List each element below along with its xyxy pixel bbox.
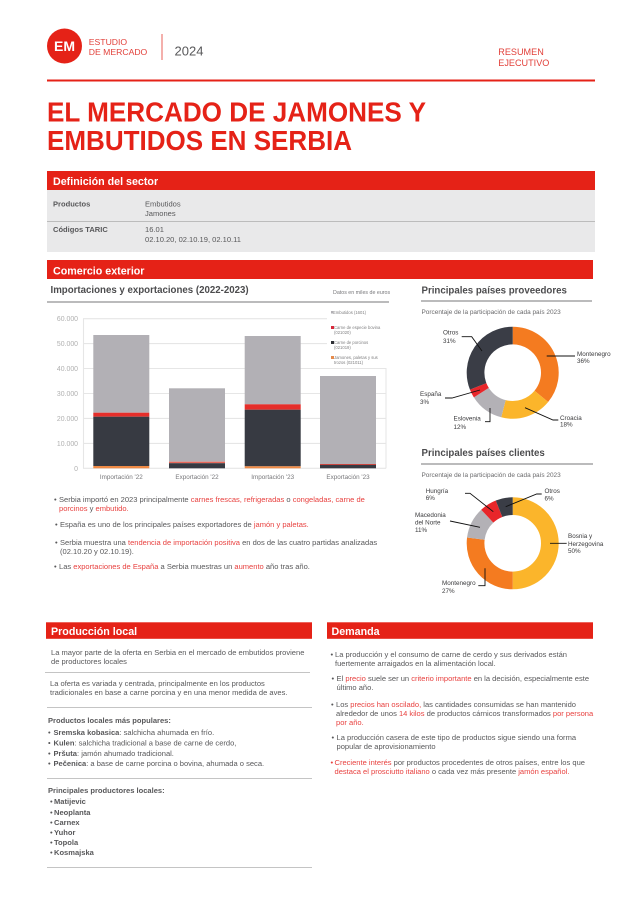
heading: definicion del sector [47,171,595,190]
chart legend: Embutidos (1601) [333,310,367,315]
subtitle: proveedores: Porcentaje de la participación de cada país 2023 [422,309,561,316]
y axis labels: 0 [74,466,78,473]
list: productos locales: • [48,749,51,758]
chart note: Datos en miles de euros [333,290,390,296]
row: codigos taric [53,225,241,244]
text block: variedad: La oferta es variada y centrada, principalmente en los productos [50,679,265,688]
title: EL MERCADO DE JAMONES Y [47,97,426,128]
y axis labels: 20.000 [57,416,78,423]
text block: comercio exterior bullets: Las exportaciones de España a Serbia muestras un aumento año tras año. [59,562,310,571]
text block: comercio exterior bullets: • [54,562,57,571]
x axis labels: Importación '22 [100,474,143,481]
chart legend: trozos (021011) [334,360,364,365]
label: eslovenia: Eslovenia [454,416,481,422]
label: otros: 6% [544,496,554,502]
label: macedonia del norte: Macedonia [415,512,446,519]
heading: importaciones y exportaciones: Importaciones y exportaciones (2022-2023) [50,285,249,296]
label: bosnia y herzegovina: 50% [568,548,581,555]
label: montenegro: Montenegro [577,351,611,358]
logo badge: EM [54,38,75,54]
label: espana [420,390,480,406]
text block: variedad [50,679,287,697]
list: productores locales: Neoplanta [54,808,91,817]
list: productores locales: Yuhor [54,828,75,837]
heading: comercio exterior: Comercio exterior [53,266,144,278]
list: productores locales [48,786,165,857]
label: otros: 31% [443,338,456,345]
list: productores locales: • [50,818,53,827]
document type [498,47,549,68]
text block: demanda bullets: • [332,674,334,683]
label: otros [506,488,560,507]
text block: demanda bullets: La producción y el consumo de carne de cerdo y sus derivados están [335,650,567,659]
panel: definicion del sector [47,171,595,252]
text block: demanda bullets: fuertemente arraigados en la alimentación local. [335,659,496,668]
label: espana: España [420,391,442,398]
list: productores locales: • [50,797,53,806]
text block: oferta: La mayor parte de la oferta en Serbia en el mercado de embutidos proviene [51,648,304,657]
list: productos locales: • [48,728,51,737]
list: productos locales: • [48,738,51,748]
label: montenegro [442,568,485,595]
label: croacia [525,408,582,428]
text block: demanda bullets: • [330,650,334,659]
document type: RESUMEN [498,47,544,57]
label: croacia: 18% [560,422,573,428]
list: productores locales: • [50,838,53,847]
bar: exportacion 22 [169,388,225,468]
heading: definicion del sector: Definición del sector [53,176,158,188]
row: productos: Productos [53,200,90,208]
donut chart: proveedores [420,330,611,431]
panel: demanda [327,622,594,776]
text block: variedad: tradicionales en base a carne porcina y en una menor medida de aves. [50,688,287,697]
text block: comercio exterior bullets: España es uno de los principales países exportadores de jamón y paletas. [60,520,309,529]
y axis labels [57,316,78,473]
text block: comercio exterior bullets: porcinos y embutido. [59,504,129,513]
text block: demanda bullets: destaca el prosciutto italiano o cada vez más presente jamón español. [334,767,569,776]
row: productos: Jamones [145,209,176,218]
list: productores locales: Principales productores locales: [48,786,165,795]
logo wordmark: DE MERCADO [89,47,148,57]
bar: exportacion 23 [320,376,376,468]
text block: comercio exterior bullets: (02.10.20 y 02.10.19). [60,547,134,556]
x axis labels: Importación '23 [251,474,295,481]
text block: comercio exterior bullets: • [54,495,57,504]
heading: principales paises proveedores: Principales países proveedores [422,286,567,296]
list: productos locales: • [48,759,51,768]
y axis labels: 30.000 [57,391,78,398]
label: hungria: 6% [426,495,435,502]
year [162,34,203,60]
heading: demanda: Demanda [332,626,381,638]
text block: demanda bullets: popular de aprovisionamiento [336,742,436,751]
heading: produccion local: Producción local [51,626,137,638]
heading: demanda [327,622,593,639]
text block: demanda bullets: • [332,733,334,742]
list: productores locales: Matijevic [54,797,86,806]
label: montenegro: 36% [577,358,590,365]
label: otros: Otros [443,330,458,336]
logo wordmark [89,37,148,57]
list: productores locales: • [50,808,53,817]
panel: produccion local [45,622,312,868]
list: productores locales: Carnex [54,818,80,827]
row: productos [53,200,181,218]
chart legend: Jamones, paletas y sus [334,355,378,360]
label: bosnia y herzegovina [550,533,604,555]
chart legend [331,310,381,365]
text block: demanda bullets: por año. [336,718,364,727]
row: codigos taric: Códigos TARIC [53,225,108,234]
label: otros: Otros [544,488,560,495]
list: productos locales: Pečenica: a base de carne porcina o bovina, ahumada o seca. [54,759,264,768]
chart legend: (021019) [334,345,351,350]
label: montenegro: Montenegro [442,580,476,587]
text block: demanda bullets: Creciente interés por productos procedentes de otros países, entre los que [334,758,585,767]
list: productores locales: • [50,828,53,837]
document type: EJECUTIVO [498,58,549,68]
chart legend: (021020) [334,330,351,335]
list: productores locales: • [50,848,53,857]
year: 2024 [174,44,203,58]
chart legend: Carne de especie bovina [334,325,381,330]
list: productos locales: Pršuta: jamón ahumado tradicional. [54,749,174,758]
heading: comercio exterior [47,260,593,279]
y axis labels: 40.000 [57,366,78,373]
heading: produccion local [46,622,312,639]
text block: oferta: de productores locales [51,657,127,666]
x axis labels [100,474,370,481]
y axis labels: 10.000 [57,441,78,448]
x axis labels: Exportación '23 [326,474,370,481]
text block: comercio exterior bullets: • [55,520,58,529]
label: bosnia y herzegovina: Herzegovina [568,541,604,548]
header [47,28,595,82]
y axis labels: 50.000 [57,341,78,348]
bar: importacion 23 [245,336,301,468]
text block: demanda bullets: alrededor de unos 14 kilos de productos cárnicos transformados por persona [336,709,594,718]
label: eslovenia [454,408,490,431]
list: productos locales: Productos locales más populares: [48,716,171,725]
text block: comercio exterior bullets [54,495,377,571]
label: espana: 3% [420,399,430,406]
list: productos locales [48,716,264,768]
text block: demanda bullets: El precio suele ser un criterio importante en la decisión, especialmente este [336,674,589,683]
label: otros [443,330,482,351]
row: productos: Embutidos [145,200,181,208]
label: bosnia y herzegovina: Bosnia y [568,533,593,540]
list: productos locales: Sremska kobasica: salchicha ahumada en frío. [54,728,214,737]
text block: demanda bullets: • [330,758,334,767]
text block: demanda bullets: último año. [336,683,373,692]
chart legend: Carne de porcinos [334,340,368,345]
label: macedonia del norte: del Norte [415,520,441,526]
label: eslovenia: 12% [454,424,467,431]
logo wordmark: ESTUDIO [89,37,127,47]
text block: comercio exterior bullets: • [55,538,58,547]
label: montenegro: 27% [442,588,455,595]
label: macedonia del norte [415,512,480,534]
list: productores locales: Kosmajska [54,848,95,857]
row: codigos taric: 02.10.20, 02.10.19, 02.10.11 [145,235,241,244]
text block: comercio exterior bullets: Serbia importó en 2023 principalmente carnes frescas, refrigeradas o congeladas, carne de [59,495,365,504]
label: macedonia del norte: 11% [415,527,428,534]
heading: principales paises clientes: Principales países clientes [422,448,545,459]
title: EMBUTIDOS EN SERBIA [47,125,352,156]
list: productores locales: Topola [54,838,79,847]
text block: demanda bullets: • [331,700,334,709]
text block: demanda bullets: Los precios han oscilado, las cantidades consumidas se han mantenido [336,700,576,709]
text block: oferta [51,648,304,666]
donut chart: clientes [415,488,604,595]
text block: demanda bullets: La producción casera de este tipo de productos sigue siendo una forma [336,733,577,742]
label: croacia: Croacia [560,415,582,422]
title [47,97,426,156]
x axis labels: Exportación '22 [175,474,219,481]
text block: demanda bullets [330,650,594,776]
bar chart: importaciones y exportaciones [57,310,386,481]
subtitle: clientes: Porcentaje de la participación de cada país 2023 [422,472,561,479]
logo badge [47,28,82,64]
list: productos locales: Kulen: salchicha tradicional a base de carne de cerdo, [54,738,236,748]
row: codigos taric: 16.01 [145,225,164,234]
bar: importacion 22 [93,335,149,468]
y axis labels: 60.000 [57,316,78,323]
label: hungria [426,488,493,512]
label: hungria: Hungría [426,488,449,495]
label: montenegro [547,351,611,365]
text block: comercio exterior bullets: Serbia muestra una tendencia de importación positiva en dos de las cuatro partidas analizadas [60,538,377,547]
